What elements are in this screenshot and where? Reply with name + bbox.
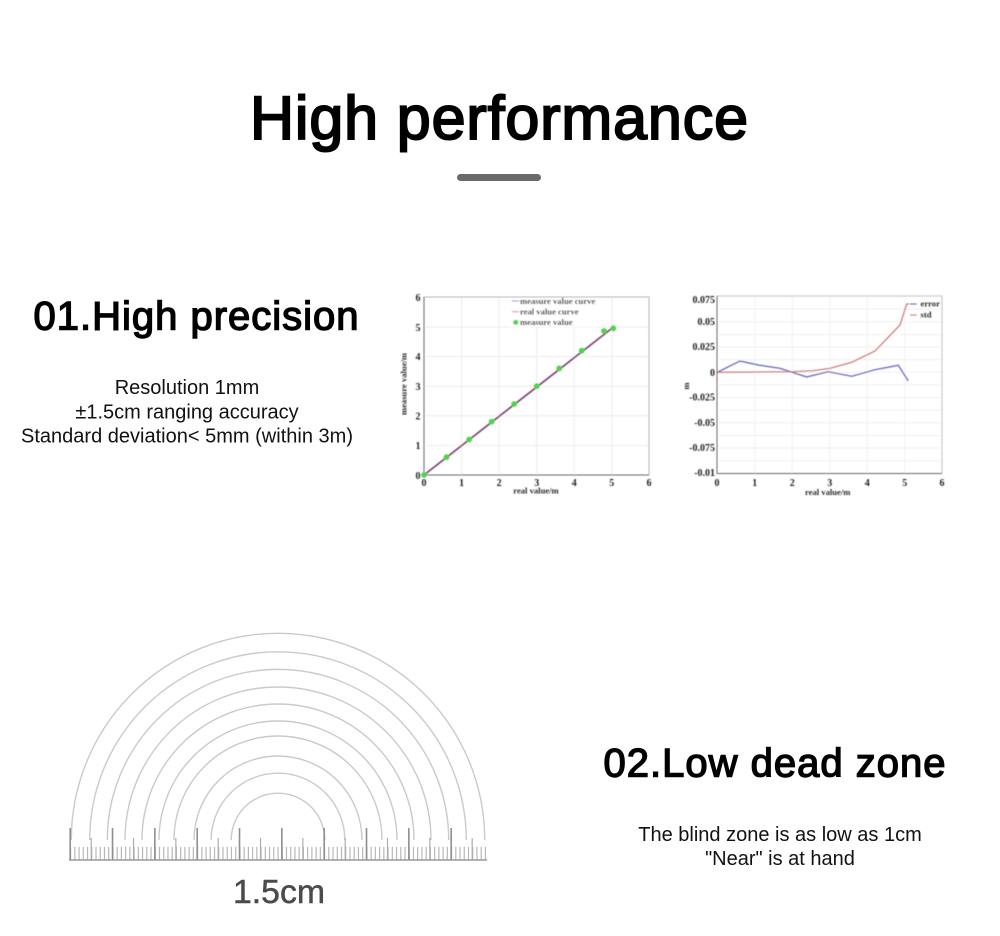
chart: error and std: 5 <box>902 478 907 489</box>
tick labels: 0 <box>416 471 420 482</box>
tick labels: 6 <box>646 478 652 489</box>
tick labels: 1 <box>459 478 464 489</box>
legend <box>509 296 597 327</box>
tick labels: 0.025 <box>692 342 715 353</box>
legend: measure value <box>520 317 573 327</box>
diagram: concentric arcs and ruler <box>69 633 487 910</box>
tick labels <box>416 293 652 489</box>
axis labels: real value/m <box>513 486 560 496</box>
tick labels <box>689 295 715 479</box>
tick labels: 3 <box>416 382 420 393</box>
tick labels: 2 <box>497 478 502 489</box>
heading: 01.High precision: 01.High precision <box>34 294 358 338</box>
chart: error and std: 1 <box>752 478 757 489</box>
tick labels: 4 <box>572 478 577 489</box>
tick labels: 0 <box>422 478 426 489</box>
tick labels: 0 <box>710 368 715 379</box>
chart: error and std: m <box>681 382 691 390</box>
concentric arcs <box>71 633 485 840</box>
tick labels: 2 <box>416 412 420 422</box>
data points <box>421 325 616 478</box>
section 01: high precision text <box>21 294 358 448</box>
tick labels: 0.05 <box>698 317 715 328</box>
legend: measure value curve <box>520 296 595 306</box>
ruler <box>69 844 487 860</box>
legend: std <box>920 310 932 320</box>
chart: error and std <box>681 295 944 497</box>
error curve <box>717 361 908 381</box>
text block: precision specs: ±1.5cm ranging accuracy <box>75 402 299 424</box>
tick labels: 3 <box>534 478 539 489</box>
heading: 02.Low dead zone: 02.Low dead zone <box>604 741 946 785</box>
text block: blind zone description: "Near" is at hand <box>705 848 855 870</box>
ruler label: 1.5cm <box>233 873 325 910</box>
chart: error and std: 6 <box>940 478 944 489</box>
title: High performance <box>250 84 748 152</box>
legend <box>910 298 940 320</box>
tick labels: 5 <box>416 323 420 334</box>
tick labels: 0.075 <box>692 295 715 306</box>
text block: precision specs <box>21 377 353 448</box>
tick labels: -0.01 <box>694 468 715 479</box>
section 02: low dead zone text <box>604 741 946 870</box>
axis labels: real value/m <box>805 487 851 497</box>
tick labels: -0.075 <box>689 443 715 454</box>
chart: measure value vs real value <box>398 293 652 496</box>
text block: blind zone description: The blind zone is as low as 1cm <box>638 824 922 846</box>
chart: error and std: 3 <box>827 478 832 489</box>
tick labels: 6 <box>416 293 420 304</box>
tick labels: -0.025 <box>689 392 715 404</box>
text block: precision specs: Resolution 1mm <box>115 377 259 399</box>
curve <box>424 327 614 475</box>
legend: real value curve <box>520 306 579 316</box>
chart: error and std: 0 <box>714 478 720 489</box>
legend: error <box>920 298 940 308</box>
tick labels: 5 <box>609 478 614 489</box>
text block: precision specs: Standard deviation< 5mm (within 3m) <box>21 426 353 448</box>
chart: error and std: 4 <box>865 478 870 489</box>
chart: error and std: 2 <box>790 478 795 489</box>
text block: blind zone description <box>638 824 922 870</box>
tick labels: 1 <box>416 441 420 452</box>
title underline <box>457 174 541 181</box>
tick labels: -0.05 <box>694 418 715 429</box>
std curve <box>717 304 909 372</box>
tick labels: 4 <box>416 352 420 363</box>
chart: measure value vs real value: measure value/m <box>398 352 408 415</box>
